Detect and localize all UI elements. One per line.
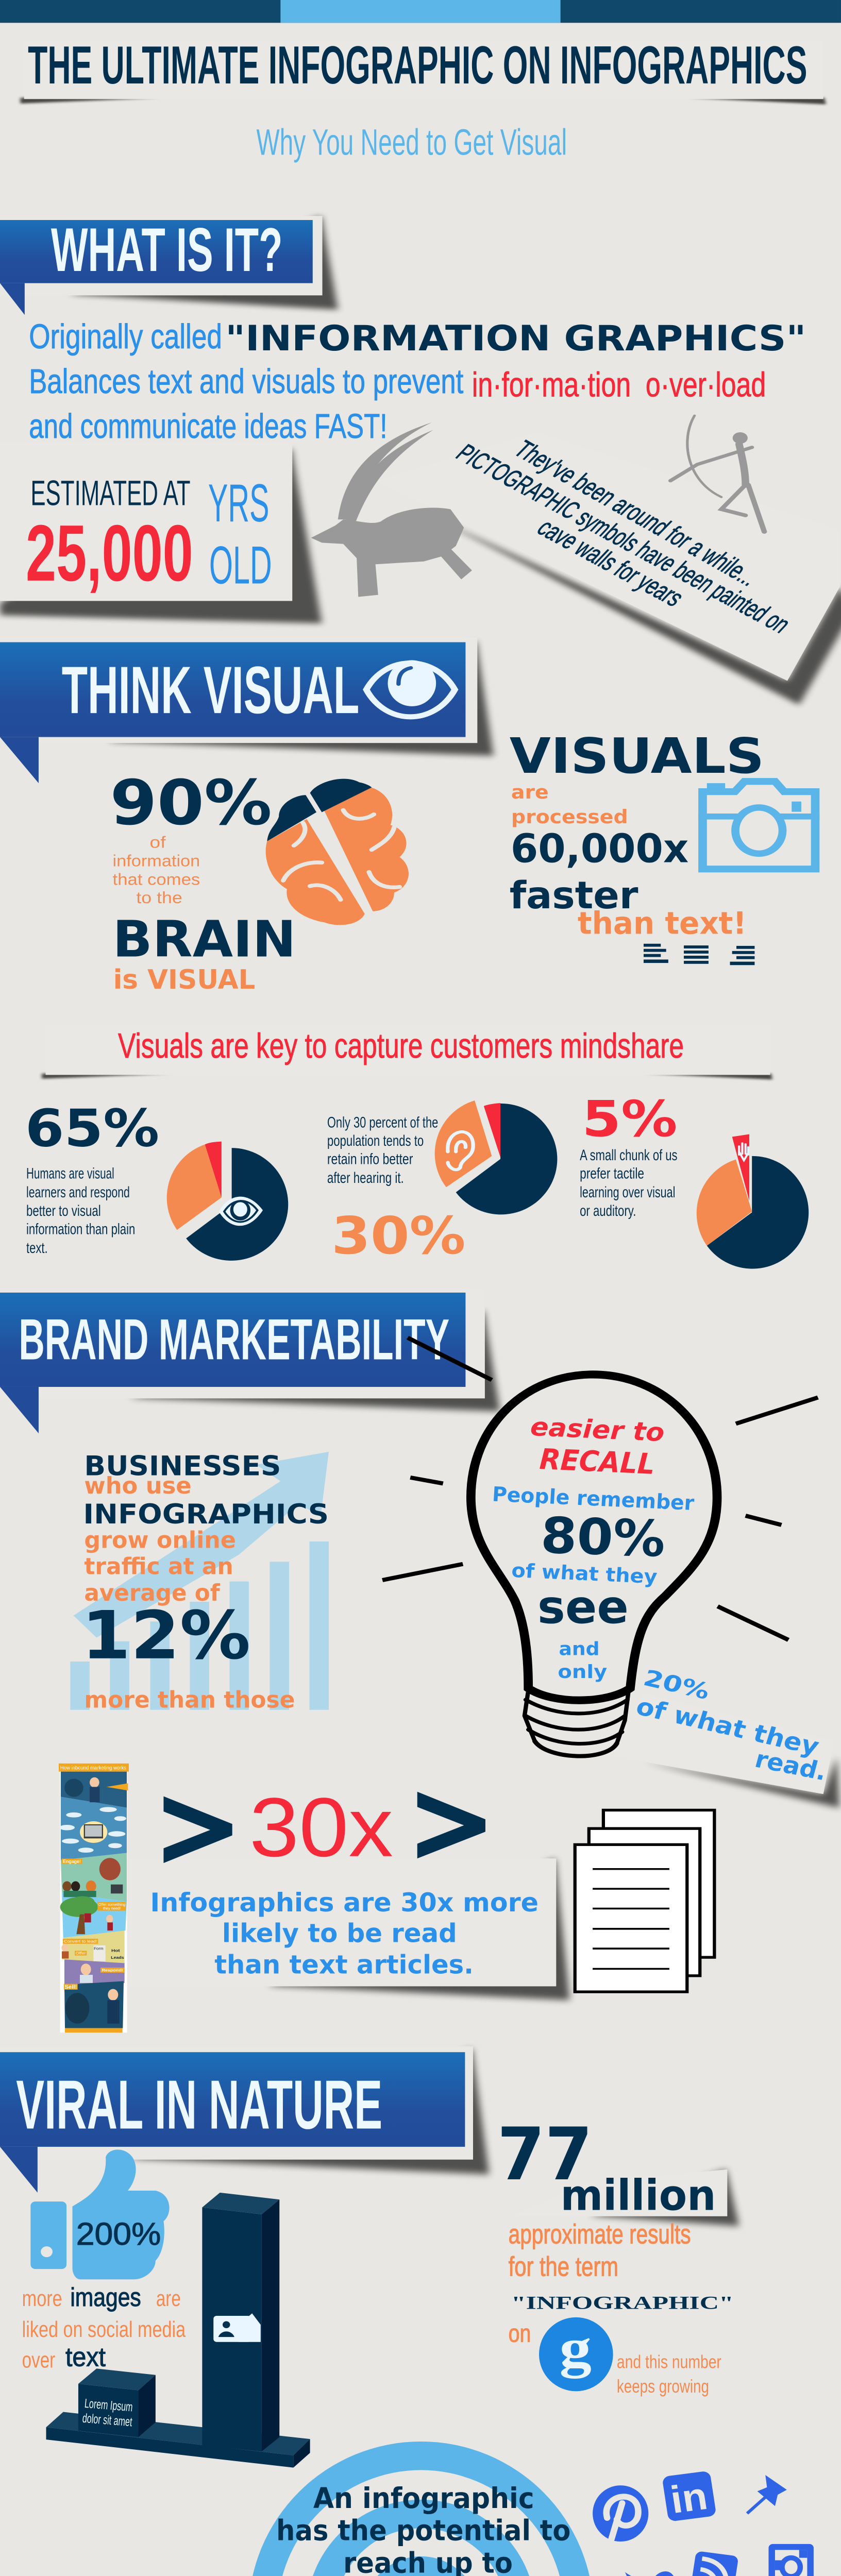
callout: mindshare [42, 1024, 772, 1079]
icon: image in hand [213, 2313, 261, 2342]
stat: 65 percent visual learners: text. [26, 1240, 48, 1257]
stat: 77 million: and this number [617, 2352, 721, 2372]
pie chart: 30 percent [435, 1100, 557, 1214]
stat: 200 percent: images [70, 2283, 141, 2312]
banner: brand marketability: BRAND MARKETABILITY [19, 1307, 449, 1371]
stat: 200 percent: text [65, 2343, 106, 2372]
strip: tree: Offer something [98, 1903, 126, 1907]
stat: businesses 12 percent: more than those [84, 1687, 295, 1713]
cave drawing: antelope [311, 422, 472, 597]
strip: sell: Sell! [64, 1985, 77, 1990]
panel: viral in nature [0, 2046, 814, 2576]
stat: 30 percent hearing: retain info better [327, 1150, 413, 1168]
banner: viral in nature: VIRAL IN NATURE [16, 2065, 382, 2143]
strip: engage [61, 1858, 123, 1897]
bulb text: 80% [540, 1506, 666, 1568]
tilted paper note [606, 1693, 839, 1808]
stat: 5 percent tactile: 5% [582, 1090, 678, 1148]
chart: target rings [248, 2442, 594, 2576]
panel: estimated age: ESTIMATED AT [30, 473, 190, 513]
icon: stacked documents [575, 1810, 714, 1992]
banner: viral in nature [0, 2046, 489, 2193]
stat: 77 million: keeps growing [617, 2377, 709, 2397]
intro text: and communicate ideas FAST! [29, 406, 387, 446]
strip: sell [64, 1984, 120, 2024]
bulb text: read. [752, 1744, 830, 1786]
stat: 65 percent visual learners [25, 1098, 159, 1257]
icon: pinterest [593, 2485, 648, 2541]
icon: ear [448, 1132, 473, 1170]
stat: 15 million people [276, 2481, 570, 2576]
stat: 5 percent tactile: prefer tactile [580, 1165, 644, 1182]
stat: businesses 12 percent: grow online [84, 1527, 236, 1554]
strip: convert: Hot [111, 1948, 120, 1953]
bulb text [492, 1412, 830, 1786]
icon: google: g [560, 2318, 592, 2379]
icon: eye on pie [219, 1197, 263, 1226]
stat: 15 million people: has the potential to [276, 2514, 570, 2547]
panel: brand marketability [0, 1288, 839, 2000]
banner: what is it [0, 215, 338, 315]
icons: social media [593, 2471, 814, 2576]
panel: header and what is it [0, 0, 841, 705]
stat: 77 million: on [509, 2320, 531, 2347]
stat: 65 percent visual learners: Humans are visual [26, 1165, 114, 1182]
stat: 5 percent tactile: A small chunk of us [580, 1147, 678, 1164]
stat: 200 percent: are [156, 2285, 181, 2311]
image: sample infographic strip [59, 1764, 129, 2032]
stat: 65 percent visual learners: information than plain [26, 1221, 135, 1238]
stat: 65 percent visual learners: 65% [25, 1098, 159, 1159]
stat: 5 percent tactile [580, 1090, 678, 1219]
stat: businesses 12 percent: traffic at an [84, 1553, 233, 1580]
callout: 30x more likely: than text articles. [214, 1950, 474, 1979]
tilted paper note [311, 416, 841, 705]
stat: 5 percent tactile: learning over visual [580, 1184, 675, 1201]
stat: 65 percent visual learners: learners and respond [26, 1184, 130, 1201]
note text: cave walls for years [531, 514, 691, 612]
stat: 200 percent: over [22, 2347, 55, 2372]
stat: 90 percent brain: 90% [110, 767, 272, 839]
banner: think visual [0, 637, 494, 783]
pie chart: 65 percent [167, 1142, 288, 1261]
strip: tree: they need! [103, 1907, 121, 1911]
top colour bar [0, 0, 841, 23]
stat: 15 million people: An infographic [313, 2481, 534, 2515]
stat: 90 percent brain [110, 767, 296, 995]
bulb text: People remember [492, 1483, 695, 1515]
icon: camera [698, 782, 819, 869]
chart: 3D bars: Lorem Ipsum [84, 2396, 133, 2414]
callout: 30x more likely: 30x [249, 1781, 393, 1874]
callout: 30x more likely: likely to be read [222, 1919, 457, 1948]
intro text: Originally called [29, 317, 222, 356]
stat: 65 percent visual learners: better to visual [26, 1202, 101, 1219]
icon: push pin [747, 2475, 787, 2514]
icon: google [539, 2317, 613, 2391]
panel: estimated age [0, 442, 322, 623]
strip: convert [61, 1939, 124, 1961]
stat: 90 percent brain: of [149, 833, 166, 851]
bulb text: only [558, 1662, 607, 1683]
icon: thumbs up [30, 2149, 170, 2279]
stat: visuals processed 60000x faster: faster [510, 873, 638, 918]
stat: 77 million: approximate results [509, 2219, 691, 2249]
stat: 90 percent brain: information [113, 852, 200, 870]
callout: 30x more likely [129, 1781, 569, 2000]
stat: 90 percent brain: is VISUAL [113, 964, 255, 995]
stat: 30 percent hearing [327, 1114, 465, 1266]
stat: 30 percent hearing: after hearing it. [327, 1170, 404, 1187]
stat: 200 percent: 200% [76, 2216, 161, 2252]
stat: businesses 12 percent: 12% [81, 1597, 250, 1674]
cave drawing: archer [670, 416, 764, 532]
strip: owner [64, 1777, 128, 1802]
stat: visuals processed 60000x faster: 60,000x [511, 826, 688, 872]
chart: 3D bars: dolor sit amet [82, 2411, 133, 2429]
bulb text: of what they [633, 1692, 822, 1760]
banner: think visual: THINK VISUAL [62, 653, 359, 727]
bulb text: 20% [641, 1665, 713, 1704]
stat: 30 percent hearing: population tends to [327, 1132, 424, 1149]
icon: brain [266, 779, 409, 925]
stat: 77 million: for the term [509, 2251, 618, 2282]
callout: 30x more likely: Infographics are 30x more [150, 1888, 539, 1918]
banner: what is it: WHAT IS IT? [51, 215, 283, 284]
panel: estimated age: 25,000 [26, 509, 193, 598]
icon: instagram [768, 2544, 814, 2576]
banner: brand marketability [0, 1288, 500, 1433]
strip: convert: Offer [76, 1952, 87, 1956]
icon: text align [644, 944, 754, 965]
strip: respond [80, 1963, 125, 1983]
bulb text: RECALL [539, 1443, 656, 1481]
stat: 200 percent [22, 2216, 186, 2372]
strip: respond: Respond! [102, 1968, 123, 1973]
icon: rss [690, 2551, 739, 2576]
stat: visuals processed 60000x faster: processed [511, 806, 628, 828]
icon: twitter [614, 2571, 681, 2576]
bulb text: easier to [530, 1412, 665, 1447]
stat: businesses 12 percent: BUSINESSES [84, 1451, 281, 1482]
stat: visuals processed 60000x faster: VISUALS [510, 728, 764, 785]
light rays [382, 1337, 818, 1640]
strip: monitor and clouds [59, 1807, 126, 1853]
stat: 200 percent: liked on social media [22, 2316, 186, 2342]
strip: convert: Leads [111, 1955, 124, 1960]
icon: light bulb [471, 1375, 717, 1756]
stat: 200 percent: more [22, 2285, 62, 2311]
image: sample infographic strip: How inbound marketing works [60, 1765, 126, 1771]
bulb text: and [559, 1638, 600, 1660]
stat: visuals processed 60000x faster: are [511, 781, 549, 803]
note text [450, 435, 797, 638]
stat: 30 percent hearing: Only 30 percent of the [327, 1114, 438, 1131]
intro text: Balances text and visuals to prevent [29, 362, 463, 401]
bulb text: see [537, 1580, 629, 1634]
stat: 77 million [497, 2112, 739, 2397]
panel: estimated age: YRS [208, 473, 269, 533]
icon: linkedin: in [667, 2474, 710, 2521]
stat: businesses 12 percent: INFOGRAPHICS [83, 1499, 329, 1530]
bulb text: of what they [511, 1559, 658, 1588]
stat: businesses 12 percent: average of [84, 1580, 221, 1606]
stat: businesses 12 percent: who use [84, 1473, 192, 1499]
stat: 77 million: million [561, 2171, 716, 2220]
panel: estimated age: OLD [209, 535, 272, 595]
stat: 77 million: "INFOGRAPHIC" [511, 2293, 734, 2313]
panel: think visual [0, 637, 819, 1269]
strip: convert: Form [94, 1946, 104, 1951]
chart: 3D bars [46, 2193, 310, 2468]
stat: visuals processed 60000x faster: than text! [578, 905, 747, 941]
stat: businesses 12 percent [81, 1451, 329, 1713]
pie chart: 5 percent [697, 1134, 809, 1269]
strip: engage: Engage! [63, 1859, 81, 1864]
icon: eye [366, 660, 455, 717]
intro text [29, 317, 806, 446]
stat: 90 percent brain: BRAIN [113, 910, 296, 969]
chart: rising bars and arrow [70, 1452, 329, 1710]
strip: tree [60, 1896, 126, 1934]
icon: hand [739, 1143, 748, 1160]
stat: visuals processed 60000x faster [510, 728, 764, 941]
stat: 30 percent hearing: 30% [331, 1206, 465, 1266]
title plate [21, 35, 826, 104]
strip: convert: Convert to lead! [64, 1939, 97, 1943]
stat: 90 percent brain: that comes [113, 870, 200, 888]
stat: 77 million: 77 [497, 2112, 593, 2197]
stat: 5 percent tactile: or auditory. [580, 1202, 636, 1219]
stat: 90 percent brain: to the [136, 889, 182, 907]
